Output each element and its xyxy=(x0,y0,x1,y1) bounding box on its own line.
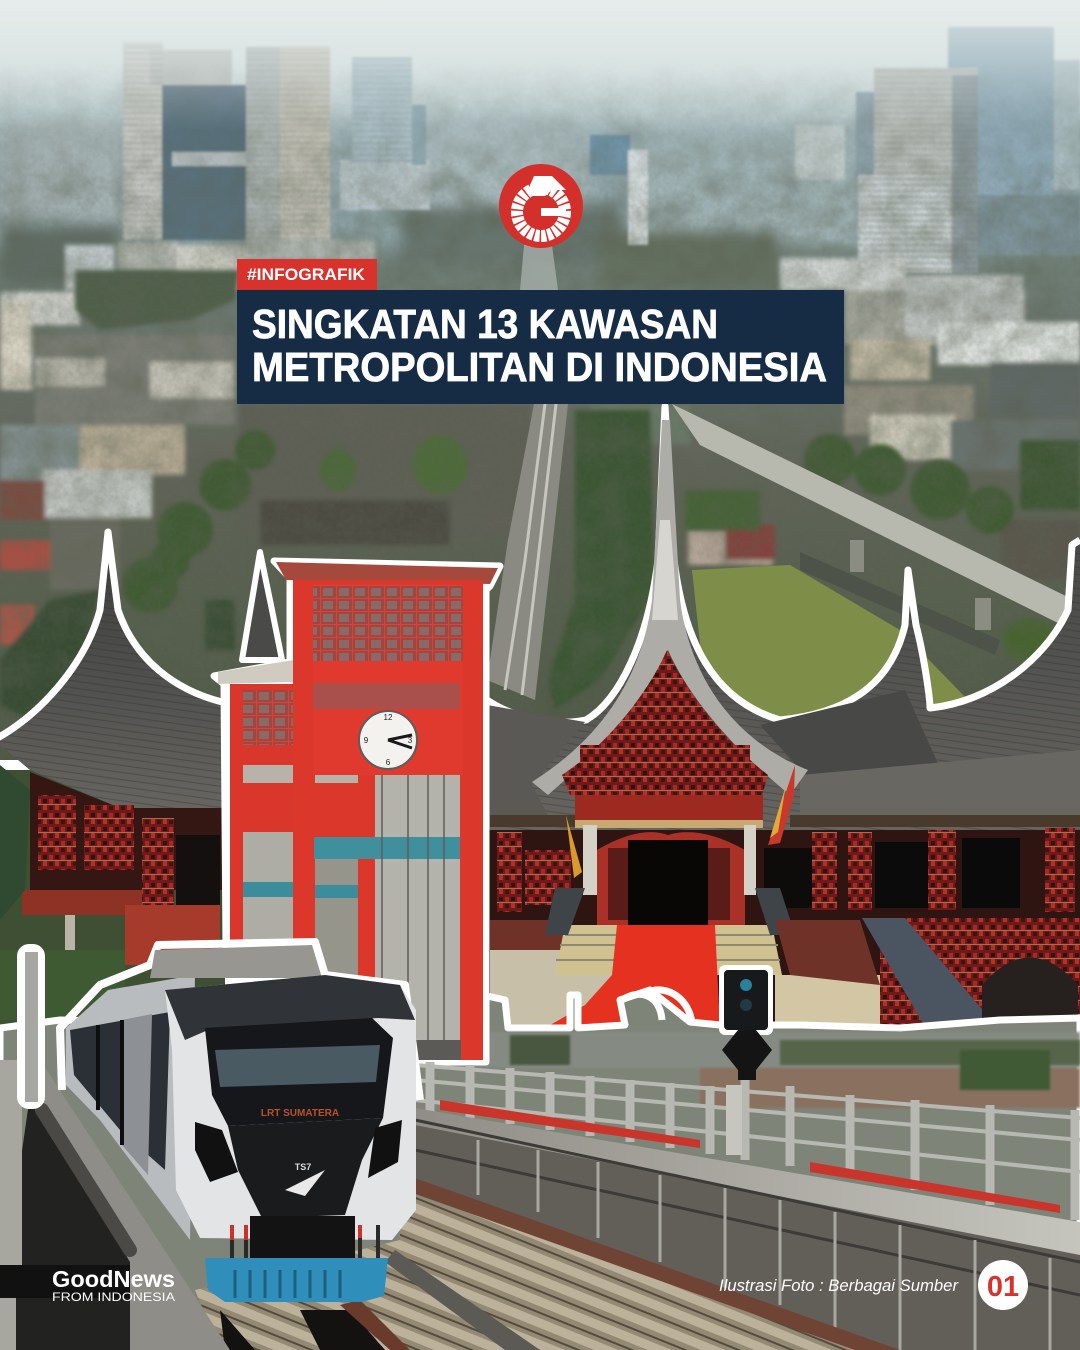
roof white cut-out line xyxy=(487,406,1080,722)
page number badge: 01 xyxy=(987,1271,1019,1303)
hashtag tag: #INFOGRAFIK xyxy=(247,265,366,284)
curved white cut-outs xyxy=(622,990,692,1024)
traffic signal xyxy=(719,965,773,1155)
coupling xyxy=(250,1216,355,1264)
foliage at left edge xyxy=(0,765,30,920)
brand: GoodNews from Indonesia: FROM INDONESIA xyxy=(52,1290,175,1304)
left roof white cut-out line xyxy=(0,532,222,740)
clock band xyxy=(313,661,463,775)
lower scene silhouette and distant city xyxy=(0,990,1080,1350)
LRT train: TS7 xyxy=(295,1162,311,1172)
left Minangkabau wing xyxy=(0,532,225,1030)
clock face: 3 xyxy=(408,736,413,745)
title block xyxy=(237,290,844,404)
LRT train: LRT SUMATERA xyxy=(261,1108,339,1119)
side arched grille xyxy=(982,958,1078,1020)
mid-ground rooftops and street blocks xyxy=(0,240,1080,645)
train white outline xyxy=(60,942,420,1100)
high-rise towers right xyxy=(856,27,1080,273)
background: hazy aerial city xyxy=(0,0,1080,760)
green field xyxy=(692,565,968,725)
main frame xyxy=(293,580,483,1060)
lamp pole xyxy=(17,944,45,1109)
windshield xyxy=(205,1018,393,1126)
clock face: 12 xyxy=(384,713,393,722)
brand: GoodNews from Indonesia: GoodNews xyxy=(52,1266,175,1292)
LRT train xyxy=(60,942,420,1302)
carved red panels xyxy=(497,832,522,912)
staircase xyxy=(555,925,782,975)
central elevated railway xyxy=(487,245,568,700)
brand: GoodNews from Indonesia xyxy=(0,1265,175,1304)
LRT viaduct xyxy=(0,944,1080,1350)
hashtag tag xyxy=(237,259,377,290)
trees xyxy=(0,270,1080,720)
railing xyxy=(415,1062,1080,1220)
clock tower: Jam Gadang style xyxy=(214,561,500,1062)
train front upper xyxy=(165,975,416,1240)
windows xyxy=(764,848,812,908)
tower cap xyxy=(276,562,498,584)
platform right xyxy=(775,975,900,1028)
lower roof eaves xyxy=(487,705,585,815)
stair side ramps xyxy=(545,888,585,935)
upper lattice xyxy=(313,585,463,661)
building body xyxy=(487,800,1080,1030)
grey ramp xyxy=(862,918,997,1027)
dark doorway xyxy=(628,840,708,925)
title block: SINGKATAN 13 KAWASAN xyxy=(252,301,718,347)
teal band xyxy=(314,837,460,859)
high-rise towers left xyxy=(123,42,426,243)
left dark parapet xyxy=(15,1095,130,1350)
fine noise texture over city xyxy=(0,128,1080,640)
train side xyxy=(66,975,195,1240)
photo credit: Ilustrasi Foto : Berbagai Sumber xyxy=(719,1276,959,1295)
concrete deck edge xyxy=(415,1108,1080,1262)
logo badge xyxy=(499,164,583,248)
gable ornament xyxy=(562,650,768,795)
entrance arch xyxy=(597,832,745,925)
clock face: 6 xyxy=(386,758,391,767)
mottled tone variation xyxy=(0,85,1080,684)
tower white outline xyxy=(214,561,500,1062)
blue skirt xyxy=(205,1258,388,1302)
Minangkabau building: Istana Basa xyxy=(487,406,1080,1030)
clock face: 9 xyxy=(364,736,369,745)
page number badge xyxy=(978,1260,1028,1310)
red carpet xyxy=(545,925,720,1028)
clock face xyxy=(359,711,417,769)
central spire metal xyxy=(532,420,808,795)
flags xyxy=(768,765,795,845)
track bed xyxy=(195,1190,880,1350)
headlights xyxy=(195,1122,238,1182)
roof silhouette right xyxy=(487,406,1080,830)
platform left xyxy=(490,920,565,950)
train roof xyxy=(150,945,322,978)
elevated highway right xyxy=(672,404,1070,655)
viaduct wall xyxy=(415,1125,1080,1350)
title block: METROPOLITAN DI INDONESIA xyxy=(252,344,827,390)
left roof xyxy=(0,532,222,808)
nose xyxy=(228,1118,383,1218)
lower panels xyxy=(375,775,460,1045)
rear tower xyxy=(218,660,294,946)
facade band xyxy=(790,815,1080,827)
haze over the skyline xyxy=(0,0,1080,130)
distant hazy city band xyxy=(0,118,1080,290)
left facade xyxy=(30,772,225,890)
left walkway xyxy=(30,1060,230,1350)
rear roof spike behind tower xyxy=(242,552,282,660)
